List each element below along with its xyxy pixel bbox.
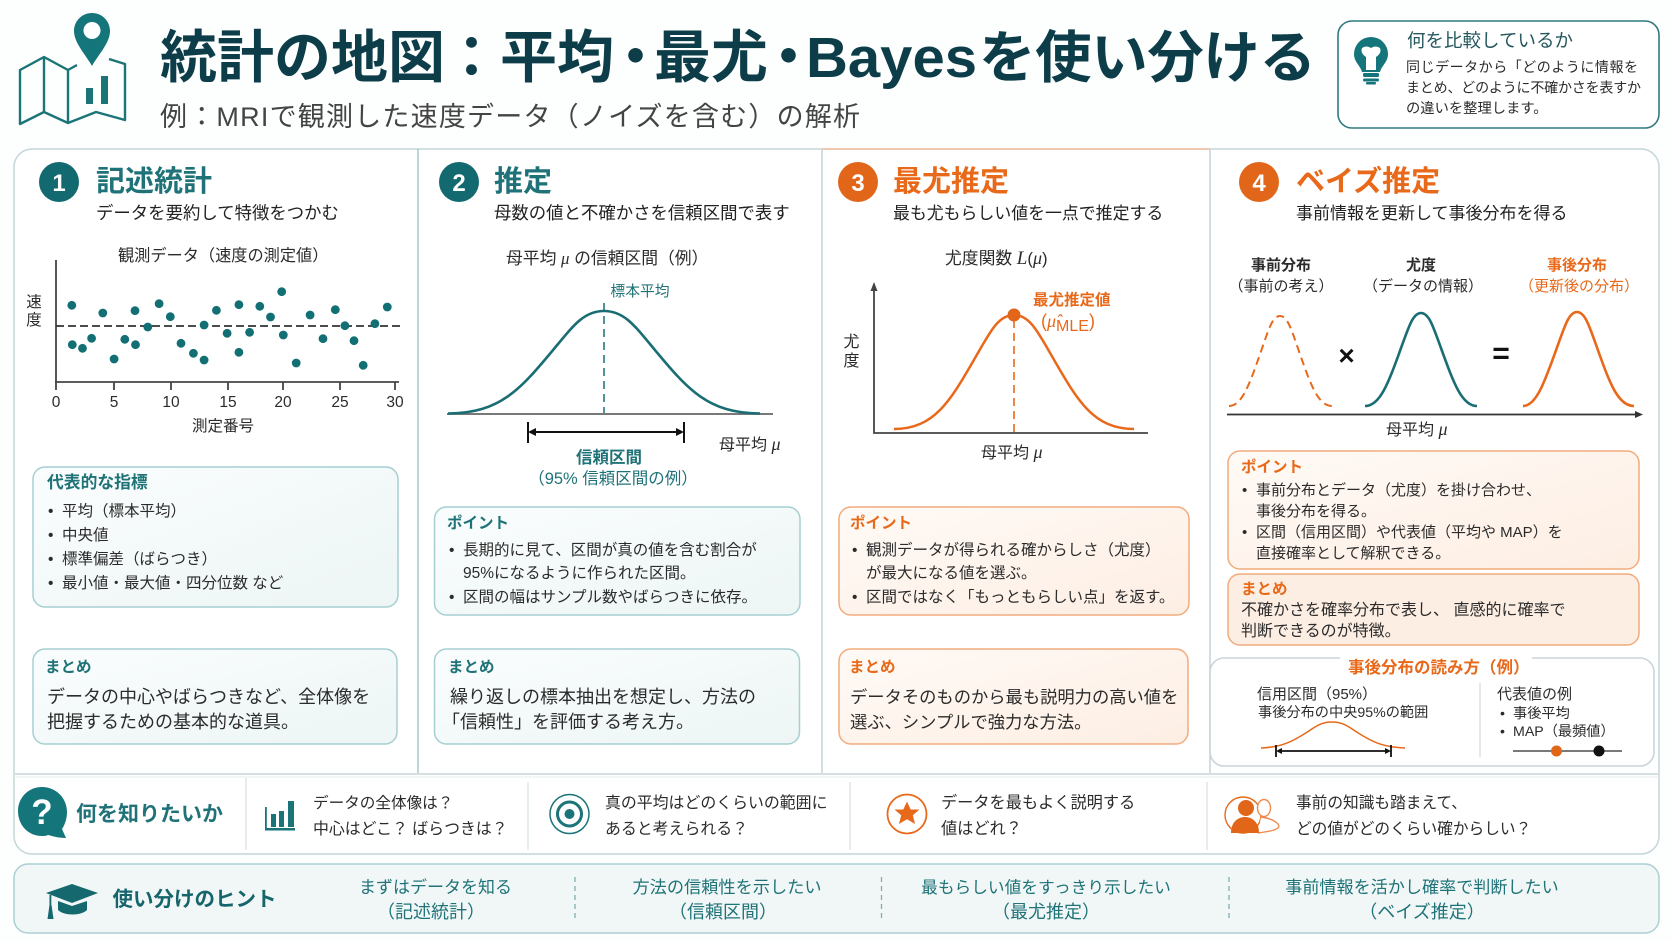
badge 2: [439, 162, 479, 202]
box: point 2: [434, 507, 800, 615]
title: [160, 26, 1316, 90]
likelihood chart: [843, 248, 1148, 462]
callout body: 同じデータから「どのように情報を: [1406, 59, 1638, 75]
badge 1: 1: [52, 170, 66, 197]
likelihood chart: 尤: [843, 333, 860, 351]
icon: target: [550, 794, 589, 834]
likelihood chart: 尤度関数 L(μ): [945, 248, 1048, 269]
likelihood chart: 度: [843, 352, 860, 370]
item: prior knowledge: どの値がどのくらい確からしい？: [1296, 820, 1531, 838]
prior times likelihood diagram: ×: [1338, 340, 1355, 371]
prior times likelihood diagram: =: [1492, 337, 1510, 370]
subheading 3: 最も尤もらしい値を一点で推定する: [893, 204, 1163, 223]
subheading 4: 事前情報を更新して事後分布を得る: [1296, 204, 1568, 223]
box: summary 4: [1228, 574, 1639, 645]
likelihood chart: ): [1089, 311, 1095, 331]
panel: how to read posterior: [1210, 653, 1654, 766]
box: summary 4: まとめ: [1241, 580, 1288, 598]
hint: likelihood: 最もらしい値をすっきり示したい: [921, 878, 1171, 897]
subtitle: 例：MRIで観測した速度データ（ノイズを含む）の解析: [160, 102, 860, 132]
callout body: まとめ、どのように不確かさを表すか: [1406, 80, 1641, 96]
item: prior knowledge: [1225, 794, 1531, 838]
hint: descriptive: [359, 877, 512, 922]
box: point 4: ポイント: [1241, 458, 1303, 476]
scatter chart: 0: [52, 394, 61, 411]
confidence interval chart: （95% 信頼区間の例）: [528, 469, 698, 488]
prior times likelihood diagram: 事前分布: [1251, 256, 1311, 274]
box: point 2: 95%になるように作られた区間。: [463, 564, 696, 582]
box: summary 4: 判断できるのが特徴。: [1241, 622, 1401, 640]
icon: question bubble: ?: [31, 793, 53, 832]
hint: Bayes: （ベイズ推定）: [1359, 902, 1485, 922]
panel: how to read posterior: 事後分布の読み方（例）: [1348, 657, 1530, 677]
hints heading: 使い分けのヒント: [112, 888, 276, 911]
heading 4: ベイズ推定: [1296, 164, 1440, 198]
scatter chart: 10: [162, 394, 180, 411]
box: point 2: 区間の幅はサンプル数やばらつきに依存。: [463, 588, 757, 606]
box: point 2: ポイント: [447, 514, 509, 532]
title: ：: [443, 26, 500, 90]
scatter chart: 30: [386, 394, 404, 411]
confidence interval chart: [447, 249, 780, 488]
badge 3: [838, 162, 878, 202]
item: range of mean: [550, 794, 827, 838]
box: representative indicators: 標準偏差（ばらつき）: [62, 550, 217, 568]
box: summary 1: まとめ: [45, 658, 92, 676]
confidence interval chart: 信頼区間: [576, 448, 642, 467]
icon: people: [1225, 797, 1279, 833]
confidence interval chart: 母平均 μ の信頼区間（例）: [506, 249, 708, 268]
hint: Bayes: 事前情報を活かし確率で判断したい: [1285, 878, 1559, 897]
box: representative indicators: [33, 467, 398, 607]
panel: how to read posterior: •: [1500, 706, 1505, 722]
confidence interval chart: 母平均 μ: [719, 434, 780, 454]
prior times likelihood diagram: （事前の考え）: [1228, 278, 1334, 295]
panel: how to read posterior: 信用区間（95%）: [1257, 686, 1377, 703]
prior times likelihood diagram: 母平均 μ: [1386, 419, 1448, 439]
subheading 2: 母数の値と不確かさを信頼区間で表す: [494, 203, 790, 223]
title: を使い分ける: [979, 26, 1316, 89]
scatter chart: 度: [26, 311, 42, 329]
title: 統計の地図: [160, 26, 445, 90]
box: point 4: 事前分布とデータ（尤度）を掛け合わせ、: [1256, 481, 1541, 499]
panel: how to read posterior: •: [1500, 724, 1505, 740]
box: point 2: 長期的に見て、区間が真の値を含む割合が: [463, 541, 757, 559]
prior times likelihood diagram: [1227, 256, 1643, 439]
scatter chart: 15: [219, 394, 237, 411]
box: summary 1: データの中心やばらつきなど、全体像を: [47, 687, 370, 707]
box: representative indicators: •: [48, 503, 53, 520]
panel: 4 Bayesian estimation: [1210, 162, 1654, 766]
hint: confidence: 方法の信頼性を示したい: [632, 877, 822, 897]
box: summary 3: まとめ: [849, 658, 896, 676]
heading 2: 推定: [494, 165, 552, 198]
box: representative indicators: 最小値・最大値・四分位数 など: [62, 574, 284, 592]
hint: confidence: [632, 877, 822, 922]
scatter chart: 20: [274, 394, 292, 411]
hint: descriptive: （記述統計）: [377, 902, 485, 922]
prior times likelihood diagram: 事後分布: [1547, 256, 1607, 274]
box: summary 2: [434, 649, 800, 744]
title: 最尤: [654, 26, 768, 90]
box: representative indicators: •: [48, 551, 53, 568]
hint: likelihood: [921, 878, 1171, 922]
box: representative indicators: •: [48, 575, 53, 592]
item: prior knowledge: 事前の知識も踏まえて、: [1296, 794, 1467, 812]
callout: what is compared: [1338, 21, 1659, 128]
prior times likelihood diagram: （更新後の分布）: [1519, 278, 1639, 295]
icon: bar chart: [265, 801, 295, 830]
box: point 3: •: [852, 542, 857, 559]
box: point 3: 区間ではなく「もっともらしい点」を返す。: [866, 588, 1174, 606]
icon: question bubble: [18, 787, 67, 838]
panel: how to read posterior: 代表値の例: [1497, 686, 1572, 703]
box: summary 2: 繰り返しの標本抽出を想定し、方法の: [450, 687, 756, 707]
scatter chart: 測定番号: [192, 417, 254, 435]
item: range of mean: 真の平均はどのくらいの範囲に: [605, 794, 827, 812]
box: point 3: [839, 507, 1189, 615]
scatter chart: 観測データ（速度の測定値）: [118, 246, 328, 265]
scatter chart: 速: [26, 293, 42, 311]
box: point 2: •: [449, 589, 454, 606]
box: point 4: [1228, 451, 1639, 569]
box: summary 4: 不確かさを確率分布で表し、 直感的に確率で: [1241, 601, 1565, 619]
item: overview: 中心はどこ？ ばらつきは？: [313, 820, 508, 838]
item: overview: データの全体像は？: [313, 793, 453, 812]
icon: star in circle: [888, 794, 926, 834]
box: representative indicators: •: [48, 527, 53, 544]
title: Bayes: [806, 26, 977, 90]
scatter chart: 25: [331, 394, 349, 411]
prior times likelihood diagram: （データの情報）: [1363, 277, 1483, 295]
likelihood chart: 母平均 μ: [981, 442, 1042, 462]
item: best explanation: データを最もよく説明する: [941, 793, 1135, 812]
hint: likelihood: （最尤推定）: [992, 902, 1100, 922]
box: point 4: •: [1242, 482, 1247, 499]
badge 3: 3: [851, 170, 865, 197]
box: point 3: 観測データが得られる確からしさ（尤度）: [866, 540, 1161, 559]
box: summary 3: データそのものから最も説明力の高い値を: [850, 687, 1178, 707]
item: best explanation: [888, 793, 1135, 838]
panel: 3 maximum likelihood: [838, 162, 1189, 744]
likelihood chart: 最尤推定値: [1033, 291, 1111, 309]
hint: Bayes: [1285, 878, 1559, 922]
row: what do you want to know: [18, 778, 1531, 850]
panel: how to read posterior: 事後平均: [1513, 706, 1570, 722]
item: overview: [265, 793, 508, 838]
box: summary 3: 選ぶ、シンプルで強力な方法。: [850, 712, 1091, 732]
bar: usage hints: [14, 864, 1659, 933]
item: best explanation: 値はどれ？: [941, 820, 1022, 838]
hint: confidence: （信頼区間）: [669, 902, 777, 922]
badge 4: 4: [1252, 170, 1266, 197]
box: point 4: 区間（信用区間）や代表値（平均や MAP）を: [1256, 524, 1563, 541]
title: 平均: [500, 26, 614, 90]
heading 1: 記述統計: [96, 165, 212, 198]
title: ・: [760, 26, 817, 90]
panel: how to read posterior: 事後分布の中央95%の範囲: [1258, 704, 1428, 721]
badge 4: [1239, 162, 1279, 202]
box: representative indicators: 中央値: [62, 526, 109, 544]
box: summary 1: 把握するための基本的な道具。: [47, 712, 299, 732]
panel: 2 estimation: [434, 162, 800, 744]
badge 2: 2: [452, 170, 466, 197]
box: representative indicators: 平均（標本平均）: [62, 502, 186, 520]
badge 1: [39, 162, 79, 202]
hint: descriptive: まずはデータを知る: [359, 877, 512, 897]
icon: light bulb: [1354, 37, 1388, 84]
prior times likelihood diagram: 尤度: [1406, 256, 1436, 274]
box: point 4: •: [1242, 524, 1247, 541]
box: representative indicators: 代表的な指標: [47, 473, 148, 492]
likelihood chart: MLE: [1056, 318, 1089, 335]
row heading: 何を知りたいか: [76, 803, 223, 826]
box: summary 2: 「信頼性」を評価する考え方。: [442, 712, 694, 732]
panel: main frame: [14, 149, 1659, 854]
panel: 1 descriptive statistics: [26, 162, 404, 744]
callout heading: 何を比較しているか: [1407, 30, 1573, 51]
callout body: [1406, 59, 1641, 117]
icon: map with pin: [20, 13, 125, 124]
item: range of mean: あると考えられる？: [605, 820, 748, 838]
heading 3: 最尤推定: [893, 165, 1009, 198]
confidence interval chart: 標本平均: [610, 283, 670, 300]
panel: how to read posterior: MAP（最頻値）: [1513, 724, 1615, 740]
subheading 1: データを要約して特徴をつかむ: [96, 203, 339, 223]
likelihood chart: (μ̂: [1041, 311, 1056, 331]
box: point 3: ポイント: [850, 514, 912, 532]
box: summary 2: まとめ: [448, 658, 495, 676]
box: point 2: •: [449, 542, 454, 559]
icon: graduation cap: [46, 884, 98, 919]
box: point 4: 直接確率として解釈できる。: [1256, 545, 1450, 562]
title: ・: [607, 26, 664, 90]
box: point 4: 事後分布を得る。: [1256, 503, 1376, 520]
box: point 3: が最大になる値を選ぶ。: [866, 564, 1037, 582]
box: point 3: •: [852, 589, 857, 606]
callout body: の違いを整理します。: [1406, 100, 1548, 117]
box: summary 3: [839, 649, 1188, 744]
box: summary 1: [33, 649, 397, 744]
scatter chart: [26, 246, 404, 435]
scatter chart: 5: [110, 394, 118, 411]
